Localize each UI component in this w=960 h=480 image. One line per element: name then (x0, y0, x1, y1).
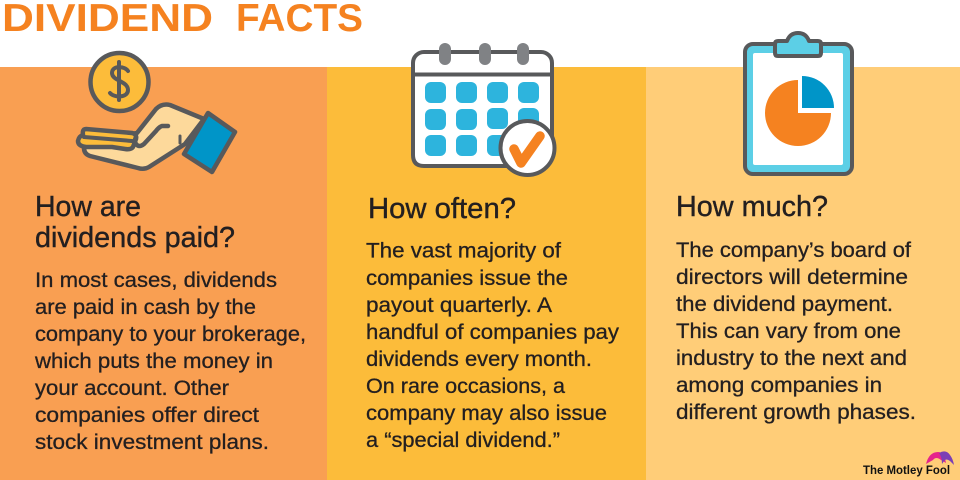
text: paid body: companies offer direct (35, 404, 259, 427)
heading: how often: How often? (368, 193, 516, 225)
text: paid body: stock investment plans. (35, 431, 269, 454)
heading: how are dividends paid: dividends paid? (35, 222, 235, 254)
panel: much background (646, 67, 960, 480)
logo: The Motley Fool (863, 451, 954, 477)
text: often body: On rare occasions, a (366, 375, 565, 398)
text: often body: companies issue the (366, 267, 568, 290)
heading: how are dividends paid: How are (35, 191, 141, 223)
text: paid body (34, 269, 306, 454)
heading: how are dividends paid (35, 191, 235, 254)
text: often body: dividends every month. (366, 348, 592, 371)
text: much body (676, 239, 916, 424)
text: paid body: company to your brokerage, (35, 323, 306, 346)
text: paid body: In most cases, dividends (35, 269, 277, 292)
icon: calendar (413, 43, 554, 175)
heading: how much: How much? (676, 191, 828, 223)
text: much body: different growth phases. (676, 401, 916, 424)
text: often body: company may also issue (366, 402, 607, 425)
text: much body: the dividend payment. (676, 293, 893, 316)
text: much body: The company’s board of (676, 239, 911, 262)
text: often body (366, 240, 620, 452)
text: often body: a “special dividend.” (366, 429, 560, 452)
text: much body: among companies in (676, 374, 882, 397)
text: often body: payout quarterly. A (366, 294, 552, 317)
text: often body: The vast majority of (366, 240, 561, 262)
icon: clipboard with pie chart (745, 33, 852, 174)
panel: often background (327, 67, 646, 480)
logo: The Motley Fool: The Motley Fool (863, 465, 950, 477)
text: much body: industry to the next and (676, 347, 907, 370)
text: paid body: which puts the money in (34, 350, 273, 373)
text: much body: This can vary from one (676, 320, 901, 343)
panel: paid background (0, 67, 327, 480)
text: often body: handful of companies pay (366, 321, 620, 344)
icon: hand with coin (78, 53, 235, 172)
text: much body: directors will determine (676, 266, 908, 289)
text: paid body: your account. Other (35, 377, 229, 400)
text: paid body: are paid in cash by the (35, 296, 256, 319)
title (2, 0, 363, 40)
